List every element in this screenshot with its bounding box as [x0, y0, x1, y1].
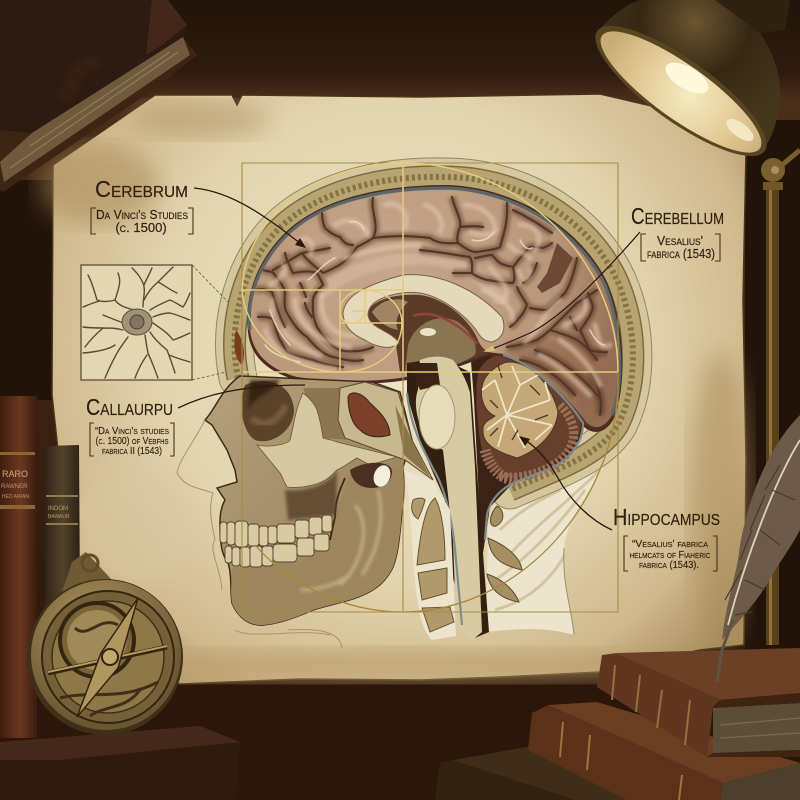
tall brown book	[0, 396, 37, 738]
parchment sheet	[40, 94, 750, 684]
label: callaurpu: fabrica II (1543)	[102, 446, 162, 457]
nasal sinus	[338, 382, 433, 480]
tall brown book: RARO	[2, 469, 28, 479]
background: dark left and right sides	[0, 120, 800, 720]
label: cerebellum: Vesalius'	[657, 233, 703, 248]
bottom book	[435, 747, 640, 800]
eye socket	[242, 381, 294, 441]
forehead sinus	[234, 330, 244, 365]
cerebral folds	[255, 197, 610, 415]
nose outline	[177, 420, 342, 648]
label: cerebrum: Da Vinci's Studies	[96, 207, 188, 222]
neuron inset	[81, 265, 228, 380]
anatomical illustration	[177, 177, 633, 648]
book stack: bottom right	[435, 648, 800, 800]
feather quill	[717, 415, 800, 682]
leader arrows	[178, 188, 640, 530]
bottom left book	[0, 726, 240, 800]
label: hippocampus: Hippocampus	[613, 504, 720, 530]
cranium ring: scalp and bone	[235, 177, 633, 490]
desk lamp	[579, 0, 800, 645]
book spines: left	[0, 396, 80, 738]
thalamus region	[372, 299, 478, 373]
dark cerebellar cavity	[470, 348, 583, 560]
brain	[247, 185, 622, 432]
label: hippocampus: helmcats of Fiaheric	[630, 550, 710, 561]
occipital lobe shading	[503, 338, 612, 424]
label: callaurpu	[86, 394, 174, 457]
label: hippocampus	[613, 504, 720, 571]
book: top left	[0, 0, 197, 192]
label: cerebellum	[631, 203, 724, 261]
ear canal	[350, 463, 392, 488]
lamp post	[761, 150, 800, 645]
neck and soft tissue	[486, 452, 612, 635]
astrolabe	[27, 552, 183, 735]
narrow grey book	[45, 445, 80, 620]
cheekbone	[257, 393, 397, 487]
golden ratio grid and spiral	[242, 163, 618, 612]
corpus callosum	[343, 275, 504, 347]
teeth	[220, 515, 332, 567]
sub-callosal brown region	[365, 295, 488, 372]
label: cerebrum: (c. 1500)	[115, 220, 167, 235]
lamp shade	[579, 0, 790, 176]
cervical vertebrae	[404, 470, 456, 640]
tall brown book: RAWNER	[1, 484, 28, 490]
dark shading under cheek	[285, 470, 337, 520]
label: callaurpu: Callaurpu	[86, 394, 173, 420]
temporal bone	[303, 388, 352, 440]
narrow grey book: BAWAUR	[48, 514, 70, 520]
pale band above callosum	[322, 258, 500, 300]
narrow grey book: INDOM	[48, 506, 68, 512]
label: callaurpu: (c. 1500) of Vebfhs	[96, 436, 169, 447]
label: cerebrum: Cerebrum	[95, 176, 188, 202]
background: shelf	[0, 678, 800, 800]
mandible	[231, 467, 404, 625]
label: hippocampus: “Vesalius' fabrica	[632, 539, 708, 550]
label: cerebellum: Cerebellum	[631, 203, 724, 229]
label: callaurpu: “Da Vinci's studies	[95, 426, 169, 437]
brain stem and spinal cord	[407, 357, 489, 642]
middle book	[528, 702, 800, 800]
dura line	[249, 188, 620, 415]
skull	[205, 330, 412, 625]
top book	[597, 648, 800, 757]
tall brown book: HED AIRAN	[2, 494, 29, 500]
label: hippocampus: fabrica (1543).	[639, 560, 699, 571]
label: cerebellum: fabrica (1543)	[647, 246, 715, 261]
label: cerebrum	[91, 176, 193, 235]
cerebellum	[476, 355, 583, 540]
